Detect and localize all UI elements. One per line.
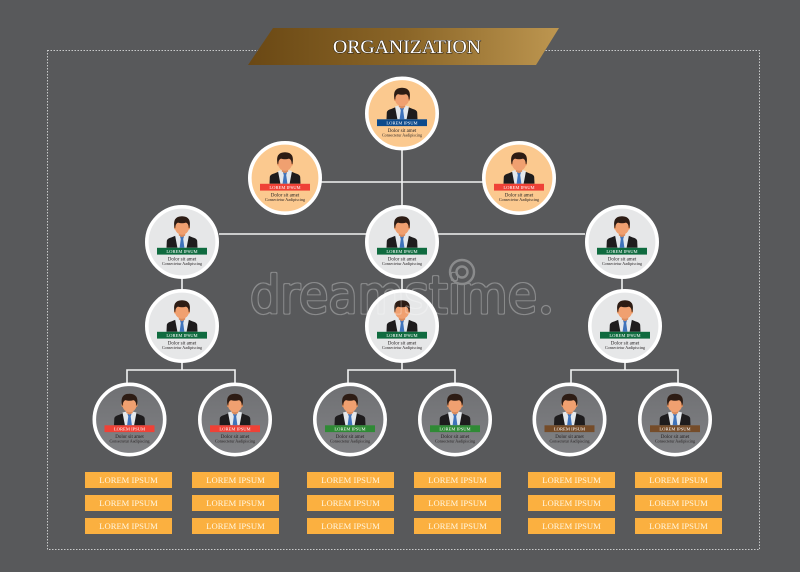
node: staff 6 <box>640 384 710 455</box>
label column 2: LOREM IPSUM <box>206 521 265 531</box>
label column 2 <box>192 472 279 534</box>
node: staff 5 <box>534 384 605 455</box>
node: staff 4: Consectetur Aadipiscing <box>435 438 475 444</box>
node: right deputy: Consectetur Aadipiscing <box>499 197 539 202</box>
label column 6: LOREM IPSUM <box>649 475 708 485</box>
label column 5 <box>528 472 615 534</box>
connector lines <box>127 150 678 383</box>
node: left deputy: Dolor sit amet <box>271 194 300 198</box>
label column 6: LOREM IPSUM <box>649 498 708 508</box>
label column 6 <box>635 472 722 534</box>
node: staff 3: Consectetur Aadipiscing <box>330 438 370 444</box>
node: left deputy: LOREM IPSUM <box>269 185 301 190</box>
label column 1: LOREM IPSUM <box>99 498 158 508</box>
label column 3: LOREM IPSUM <box>321 475 380 485</box>
node: staff 4: LOREM IPSUM <box>439 426 471 432</box>
label column 3: LOREM IPSUM <box>321 498 380 508</box>
title banner: ORGANIZATION <box>333 38 481 58</box>
node: staff 2: LOREM IPSUM <box>219 426 251 432</box>
label column 2: LOREM IPSUM <box>206 475 265 485</box>
node: right deputy: LOREM IPSUM <box>503 185 535 190</box>
node: staff 1: LOREM IPSUM <box>114 426 145 432</box>
label column 1 <box>85 472 172 534</box>
label column 3: LOREM IPSUM <box>321 521 380 531</box>
node: lead left: Consectetur Aadipiscing <box>162 345 202 350</box>
label column 4: LOREM IPSUM <box>428 521 487 531</box>
node: staff 4: Dolor sit amet <box>441 435 470 440</box>
node: staff 2: Dolor sit amet <box>221 435 250 440</box>
node: staff 2 <box>200 384 270 455</box>
node: manager right: Consectetur Aadipiscing <box>602 261 642 266</box>
node: lead center: Dolor sit amet <box>388 342 417 346</box>
node: manager right: Dolor sit amet <box>608 258 637 262</box>
node: staff 2: Consectetur Aadipiscing <box>215 438 255 444</box>
node: lead right: LOREM IPSUM <box>609 333 641 338</box>
node: lead center: LOREM IPSUM <box>386 333 418 338</box>
node: staff 4 <box>420 384 490 455</box>
node: staff 6: Dolor sit amet <box>661 435 690 440</box>
node: lead left: Dolor sit amet <box>168 342 197 346</box>
node: manager left: LOREM IPSUM <box>166 249 198 254</box>
label column 1: LOREM IPSUM <box>99 475 158 485</box>
label column 4: LOREM IPSUM <box>428 498 487 508</box>
node: lead left: LOREM IPSUM <box>166 333 198 338</box>
label column 2: LOREM IPSUM <box>206 498 265 508</box>
node: lead center: Consectetur Aadipiscing <box>382 345 422 350</box>
node: manager right: LOREM IPSUM <box>606 249 638 254</box>
node: staff 1: Dolor sit amet <box>115 435 144 440</box>
node: top executive: Consectetur Aadipiscing <box>382 132 422 138</box>
node: manager right <box>587 207 657 277</box>
node: left deputy <box>250 143 320 213</box>
label column 5: LOREM IPSUM <box>542 475 601 485</box>
label column 6: LOREM IPSUM <box>649 521 708 531</box>
node: staff 6: LOREM IPSUM <box>659 426 691 432</box>
node: staff 1: Consectetur Aadipiscing <box>109 438 150 444</box>
label column 3 <box>307 472 394 534</box>
node: manager center <box>367 207 437 277</box>
node: manager center: Dolor sit amet <box>388 258 417 262</box>
node: staff 5: LOREM IPSUM <box>554 426 585 432</box>
node: staff 6: Consectetur Aadipiscing <box>655 438 695 444</box>
node: top executive: Dolor sit amet <box>388 129 417 134</box>
node: manager left <box>147 207 217 277</box>
node: staff 5: Dolor sit amet <box>555 435 584 440</box>
node: lead right: Consectetur Aadipiscing <box>605 345 645 350</box>
node: manager left: Consectetur Aadipiscing <box>162 261 202 266</box>
label column 4: LOREM IPSUM <box>428 475 487 485</box>
node: right deputy: Dolor sit amet <box>505 194 534 198</box>
title banner <box>248 28 559 65</box>
node: lead left <box>147 291 217 361</box>
node: staff 3: LOREM IPSUM <box>334 426 366 432</box>
node: manager left: Dolor sit amet <box>168 258 197 262</box>
dashed frame <box>48 50 760 550</box>
node: right deputy <box>484 143 554 213</box>
node: staff 1 <box>94 384 165 455</box>
node: manager center: LOREM IPSUM <box>386 249 418 254</box>
label column 5: LOREM IPSUM <box>542 498 601 508</box>
watermark: dreamstime <box>250 266 537 326</box>
label column 4 <box>414 472 501 534</box>
node: lead right <box>590 291 660 361</box>
label column 1: LOREM IPSUM <box>99 521 158 531</box>
node: manager center: Consectetur Aadipiscing <box>382 261 422 266</box>
node: left deputy: Consectetur Aadipiscing <box>265 197 305 202</box>
node: top executive <box>367 78 437 149</box>
node: staff 3 <box>315 384 385 455</box>
label column 5: LOREM IPSUM <box>542 521 601 531</box>
node: lead center <box>367 291 437 361</box>
node: staff 5: Consectetur Aadipiscing <box>549 438 590 444</box>
node: staff 3: Dolor sit amet <box>336 435 365 440</box>
node: lead right: Dolor sit amet <box>611 342 640 346</box>
node: top executive: LOREM IPSUM <box>386 120 418 126</box>
